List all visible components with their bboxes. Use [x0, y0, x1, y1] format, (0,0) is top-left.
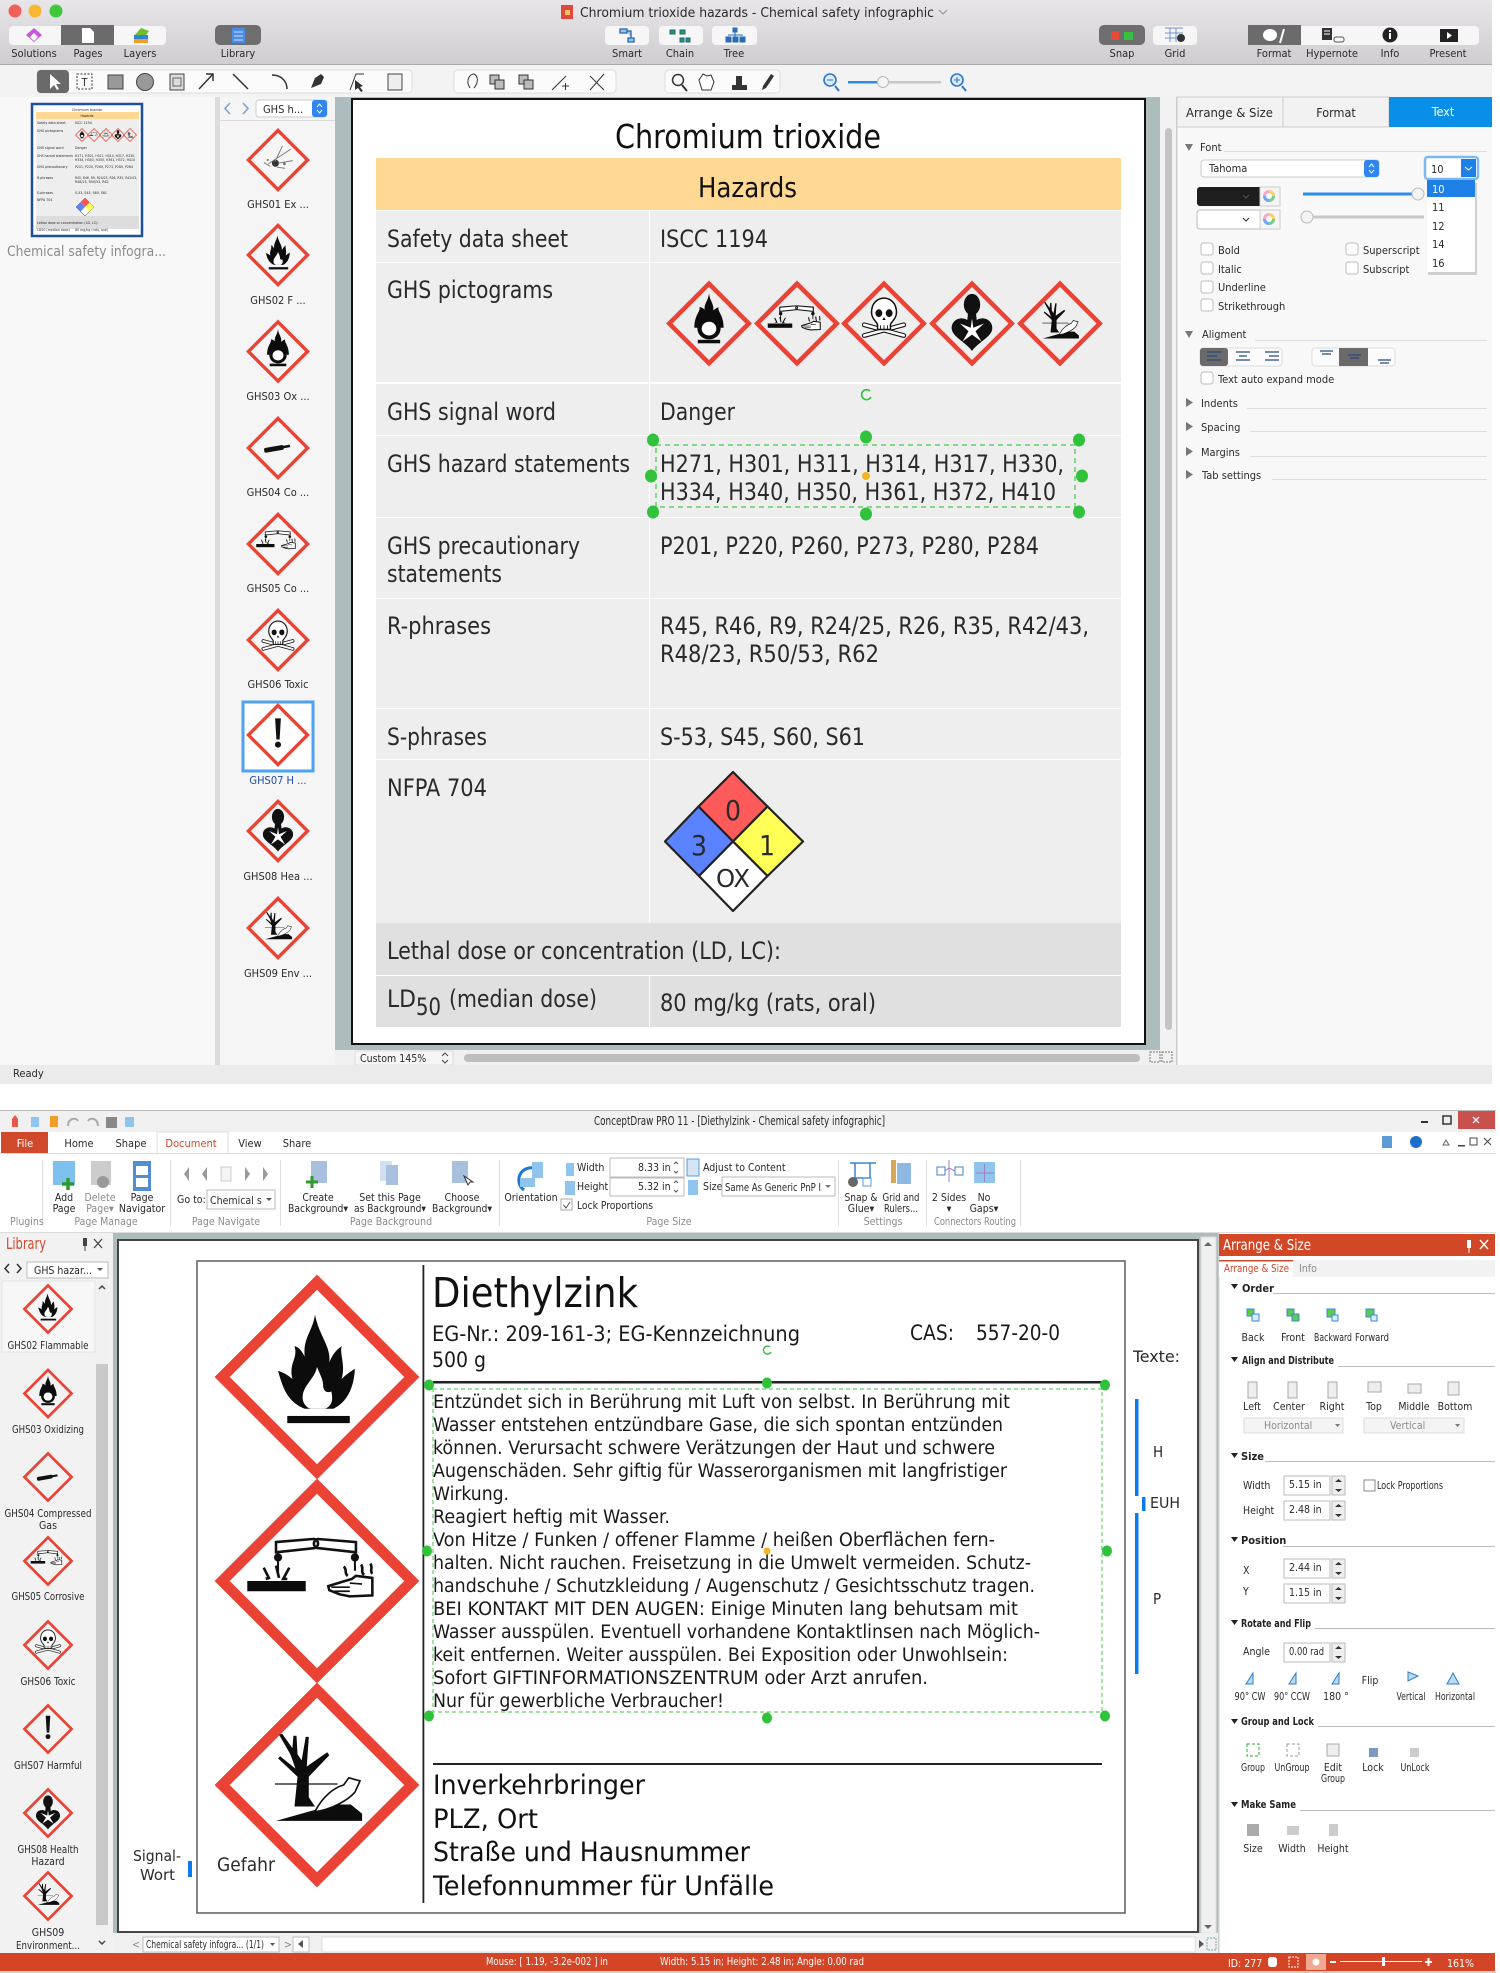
page thumbnail: LD50 (median dose): [37, 228, 70, 232]
panel: format sidebar (Text tab): Text: [1431, 104, 1455, 119]
text block: distributor address: Telefonnummer für Unfälle: [432, 1871, 774, 1902]
panel: Arrange and Size sidebar: 90° CCW: [1274, 1691, 1311, 1703]
text block: distributor address: Straße und Hausnummer: [433, 1837, 750, 1868]
panel: Arrange and Size sidebar: Forward: [1355, 1332, 1389, 1344]
status bar: lower window: Mouse: [ 1.19, -3.2e-002 ] in: [486, 1956, 608, 1968]
panel: GHS library sidebar: GHS05 Co ...: [247, 582, 309, 595]
panel: Arrange and Size sidebar: Lock Proportions: [1377, 1480, 1443, 1492]
row: GHS hazard statements: H334, H340, H350, H361, H372, H410: [660, 478, 1056, 506]
panel: mac window title bar and main toolbar: Chromium trioxide hazards - Chemical safety infographic: [580, 6, 934, 21]
panel: Arrange and Size sidebar: Back: [1242, 1332, 1265, 1344]
panel: Windows ribbon: Navigator: [119, 1203, 165, 1215]
text: CAS number: [910, 1321, 1060, 1345]
row: GHS signal word: [387, 398, 735, 426]
panel: Arrange and Size sidebar: UnLock: [1400, 1762, 1430, 1774]
panel: Windows ribbon: Choose: [445, 1192, 480, 1204]
panel: GHS library sidebar: GHS07 H ...: [249, 774, 307, 787]
panel: Windows ribbon: Glue▾: [848, 1203, 874, 1215]
panel: Windows ribbon tabs: Document: [165, 1137, 217, 1150]
panel: lower library sidebar: GHS05 Corrosive: [12, 1591, 85, 1603]
panel: lower library sidebar: GHS02 Flammable: [8, 1340, 89, 1352]
row: GHS pictograms: GHS pictograms: [387, 276, 553, 304]
panel: format sidebar (Text tab): Superscript: [1363, 244, 1420, 257]
panel: Windows ribbon: No: [978, 1192, 991, 1204]
panel: lower library sidebar: GHS08 Health: [18, 1844, 79, 1856]
panel: mac window title bar and main toolbar: Smart: [612, 47, 642, 60]
panel: Windows ribbon: Set this Page: [359, 1192, 421, 1204]
panel: GHS library sidebar: GHS h...: [263, 103, 303, 116]
text block: hazard and precaution statements: Wasser ausspülen. Eventuell vorhandene Kontaktlinsen nach Möglich-: [433, 1622, 1040, 1643]
panel: Arrange and Size sidebar: 90° CW: [1234, 1691, 1266, 1703]
page thumbnail: GHS signal word: [37, 146, 64, 150]
panel: Arrange and Size sidebar: Group and Lock: [1241, 1715, 1314, 1728]
panel: format sidebar (Text tab): Subscript: [1363, 263, 1410, 276]
page thumbnail: S-phrases: [37, 191, 53, 195]
panel: Arrange and Size sidebar: Right: [1320, 1401, 1345, 1413]
row: GHS precautionary statements: P201, P220, P260, P273, P280, P284: [660, 532, 1039, 560]
panel: format sidebar (Text tab): Format: [1316, 105, 1356, 120]
heading band: Hazards: Hazards: [698, 171, 797, 204]
panel: Windows ribbon: Chemical s: [210, 1195, 262, 1207]
text block: hazard and precaution statements: Nur für gewerbliche Verbraucher!: [433, 1691, 724, 1712]
panel: Arrange and Size sidebar: Position: [1241, 1534, 1286, 1547]
status bar: lower window: [0, 1953, 1496, 1973]
row: NFPA 704: NFPA 704: [387, 774, 487, 802]
panel: lower canvas area: Chemical safety infogra... (1/1): [146, 1939, 264, 1951]
text block: hazard and precaution statements: Augenschäden. Sehr giftig für Wasserorganismen mit langfristiger: [433, 1461, 1007, 1482]
selection handles around statements: [422, 1346, 1112, 1724]
panel: GHS library sidebar: GHS01 Ex ...: [247, 198, 309, 211]
text block: distributor address: PLZ, Ort: [433, 1804, 538, 1835]
panel: format sidebar (Text tab): Text auto expand mode: [1217, 373, 1334, 386]
panel: format sidebar (Text tab): Strikethrough: [1218, 300, 1285, 313]
signal word labels: Signal-: [133, 1847, 181, 1865]
row: GHS precautionary statements: GHS precautionary: [387, 532, 580, 560]
panel: GHS label card: [197, 1261, 1125, 1913]
panel: lower library sidebar: GHS09: [32, 1927, 64, 1939]
panel: Windows ribbon: Height: [577, 1181, 609, 1193]
panel: Arrange and Size sidebar: Vertical: [1396, 1691, 1426, 1703]
panel: mac window title bar and main toolbar: Solutions: [11, 47, 57, 60]
row: GHS signal word: GHS signal word: [387, 398, 556, 426]
status bar: lower window: 161%: [1447, 1958, 1474, 1970]
panel: Arrange and Size sidebar: Left: [1243, 1401, 1261, 1413]
panel: Windows ribbon: Page Background: [350, 1216, 432, 1228]
panel: format sidebar (Text tab): [1176, 97, 1492, 1065]
panel: Windows title bar: ConceptDraw PRO 11 - [Diethylzink - Chemical safety infographic]: [594, 1114, 885, 1128]
text block: distributor address: Inverkehrbringer: [433, 1770, 645, 1801]
row: S-phrases: [387, 723, 865, 751]
panel: Arrange and Size sidebar: Angle: [1243, 1646, 1270, 1658]
panel: Windows ribbon tabs: [0, 1132, 1496, 1154]
text block: hazard and precaution statements: Wasser entstehen entzündbare Gase, die sich spontan entzünden: [433, 1415, 1003, 1436]
panel: Arrange and Size sidebar: Group: [1321, 1773, 1345, 1785]
NFPA 704 fire diamond: 1: [759, 829, 775, 862]
annotation: text section brackets: [1132, 1347, 1180, 1674]
panel: Windows ribbon: as Background▾: [354, 1203, 426, 1215]
page thumbnail: H334, H340, H350, H361, H372, H410: [75, 158, 135, 162]
panel: Windows ribbon: Gaps▾: [970, 1203, 999, 1215]
panel: Arrange and Size sidebar: Horizontal: [1264, 1420, 1312, 1432]
row: R-phrases: R48/23, R50/53, R62: [660, 640, 879, 668]
page thumbnail: ISCC 1194: [75, 121, 92, 125]
icon: environment pictogram: [222, 1690, 412, 1880]
page thumbnail: R48/23, R50/53, R62: [75, 180, 109, 184]
row: LD50 median dose: 80 mg/kg (rats, oral): [660, 989, 876, 1017]
status bar: lower window: ID: 277: [1228, 1958, 1262, 1970]
row: GHS hazard statements: H271, H301, H311, H314, H317, H330,: [660, 450, 1064, 478]
row: GHS hazard statements: GHS hazard statements: [387, 450, 630, 478]
text block: hazard and precaution statements: BEI KONTAKT MIT DEN AUGEN: Einige Minuten lang behutsam mit: [433, 1599, 1019, 1620]
panel: Arrange and Size sidebar: Middle: [1398, 1401, 1430, 1413]
panel: format sidebar (Text tab): Underline: [1218, 281, 1266, 294]
panel: mac window title bar and main toolbar: Snap: [1110, 47, 1134, 60]
panel: Arrange and Size sidebar: Vertical: [1390, 1420, 1425, 1432]
status bar: Ready: [0, 1065, 1492, 1084]
panel: lower library sidebar: [0, 1233, 113, 1953]
panel: Arrange and Size sidebar: Width: [1278, 1843, 1306, 1855]
panel: Windows ribbon: [0, 1153, 1496, 1234]
page thumbnail: Hazards: [80, 114, 94, 118]
panel: Arrange and Size sidebar: Edit: [1324, 1762, 1342, 1774]
panel: GHS library sidebar: GHS09 Env ...: [244, 967, 312, 980]
panel: Arrange and Size sidebar: Arrange & Size: [1223, 1236, 1311, 1254]
panel: Arrange and Size sidebar: Align and Distribute: [1242, 1354, 1334, 1367]
panel: Windows ribbon: 5.32 in: [638, 1181, 671, 1193]
panel: Windows ribbon: Rulers...: [884, 1203, 918, 1215]
heading: Diethylzink: Diethylzink: [432, 1269, 639, 1317]
panel: format sidebar (Text tab): Aligment: [1202, 328, 1247, 341]
panel: Windows ribbon: Connectors Routing: [934, 1216, 1016, 1228]
page thumbnail: GHS pictograms: [37, 129, 64, 133]
panel: Arrange and Size sidebar: 0.00 rad: [1289, 1646, 1324, 1658]
panel: GHS library sidebar: GHS08 Hea ...: [243, 870, 313, 883]
panel: lower library sidebar: GHS03 Oxidizing: [12, 1424, 84, 1436]
panel: mac window title bar and main toolbar: Pages: [73, 47, 103, 60]
panel: Arrange and Size sidebar: 2.44 in: [1289, 1562, 1322, 1574]
panel: top canvas area: [335, 97, 1176, 1065]
panel: format sidebar (Text tab): Font: [1200, 141, 1222, 154]
panel: Windows title bar: [0, 1110, 1496, 1132]
panel: Windows ribbon: Background▾: [288, 1203, 348, 1215]
panel: Windows ribbon: Size: [703, 1181, 723, 1193]
panel: Arrange and Size sidebar: Make Same: [1241, 1798, 1296, 1811]
page thumbnail: GHS hazard statements: [37, 154, 73, 158]
font size dropdown: 16: [1432, 257, 1445, 270]
panel: format sidebar (Text tab): Bold: [1218, 244, 1240, 257]
panel: Arrange and Size sidebar: Arrange & Size: [1224, 1263, 1289, 1275]
NFPA 704 fire diamond: [665, 772, 803, 911]
page thumbnail: Danger: [75, 146, 88, 150]
annotation: text section brackets: EUH: [1150, 1494, 1180, 1512]
panel: format sidebar (Text tab): Arrange & Size: [1186, 105, 1273, 120]
panel: Arrange and Size sidebar: 180 °: [1323, 1691, 1349, 1703]
panel: format sidebar (Text tab): Indents: [1201, 397, 1238, 410]
panel: GHS library sidebar: [220, 97, 335, 1065]
panel: Windows ribbon: Same As Generic PnP I: [725, 1182, 821, 1194]
panel: Windows ribbon: Delete: [84, 1192, 116, 1204]
page thumbnail: P201, P220, P260, P273, P280, P284: [75, 165, 133, 169]
page thumbnail: NFPA 704: [37, 198, 52, 202]
panel: lower canvas area: [113, 1233, 1218, 1953]
text block: hazard and precaution statements: handschuhe / Schutzkleidung / Augenschutz / Gesichtsschutz tragen.: [433, 1576, 1035, 1597]
panel: Arrange and Size sidebar: Horizontal: [1435, 1691, 1475, 1703]
panel: Windows ribbon tabs: Home: [64, 1137, 94, 1150]
panel: Windows ribbon: Page Navigate: [192, 1216, 260, 1228]
panel: Windows ribbon: Go to:: [177, 1194, 206, 1206]
page name: Chemical safety infogra...: [7, 244, 166, 260]
panel: Arrange and Size sidebar: Size: [1243, 1843, 1263, 1855]
page thumbnail: GHS precautionary: [37, 165, 68, 169]
text block: hazard and precaution statements: Von Hitze / Funken / offener Flamme / heißen Oberflächen fern-: [433, 1530, 995, 1551]
row: NFPA 704: [387, 772, 803, 911]
panel: Arrange and Size sidebar: Width: [1243, 1480, 1270, 1492]
panel: lower library sidebar: Hazard: [31, 1856, 65, 1868]
row: R-phrases: R45, R46, R9, R24/25, R26, R35, R42/43,: [660, 612, 1089, 640]
panel: mac window title bar and main toolbar: Format: [1257, 47, 1292, 60]
panel: lower library sidebar: GHS06 Toxic: [20, 1676, 76, 1688]
panel: Windows ribbon: Page Manage: [74, 1216, 138, 1228]
NFPA 704 fire diamond: 3: [691, 829, 707, 862]
panel: Arrange and Size sidebar: [1218, 1233, 1496, 1953]
row: GHS precautionary statements: statements: [387, 560, 502, 588]
font size dropdown: [1427, 180, 1477, 275]
NFPA 704 fire diamond: OX: [716, 864, 750, 893]
row: GHS signal word: Danger: [660, 398, 735, 426]
panel: Arrange and Size sidebar: Size: [1241, 1450, 1264, 1463]
panel: lower library sidebar: Library: [6, 1234, 46, 1253]
text: EG number and quantity: 500 g: [432, 1348, 486, 1372]
row: lethal dose heading: Lethal dose or concentration (LD, LC):: [387, 937, 781, 965]
panel: Windows ribbon tabs: Share: [283, 1137, 311, 1150]
row: S-phrases: S-phrases: [387, 723, 487, 751]
panel: Arrange and Size sidebar: Backward: [1314, 1332, 1352, 1344]
panel: Arrange and Size sidebar: Lock: [1362, 1762, 1384, 1774]
row: R-phrases: [387, 612, 1089, 668]
panel: Arrange and Size sidebar: Group: [1241, 1762, 1265, 1774]
row: GHS hazard statements: [387, 450, 1064, 506]
panel: Windows ribbon: Width: [577, 1162, 604, 1174]
panel: format sidebar (Text tab): Tahoma: [1208, 162, 1247, 175]
text: CAS number: CAS:: [910, 1321, 954, 1345]
text: CAS number: 557-20-0: [976, 1321, 1060, 1345]
panel: drawing tools toolbar: T: [81, 77, 88, 89]
panel: Windows ribbon: Snap &: [844, 1192, 878, 1204]
panel: Windows ribbon tabs: View: [238, 1137, 262, 1150]
text block: hazard and precaution statements: [433, 1392, 1040, 1712]
annotation: text section brackets: Texte:: [1132, 1347, 1180, 1366]
panel: Windows ribbon tabs: Shape: [116, 1137, 146, 1150]
icon: corrosive pictogram: [222, 1486, 412, 1676]
panel: Windows ribbon: Grid and: [882, 1192, 920, 1204]
NFPA 704 fire diamond: 0: [725, 794, 741, 827]
page thumbnail: R-phrases: [37, 176, 53, 180]
text block: hazard and precaution statements: Reagiert heftig mit Wasser.: [433, 1507, 670, 1528]
panel: Windows ribbon: Lock Proportions: [577, 1200, 653, 1212]
panel: GHS library sidebar: GHS03 Ox ...: [246, 390, 310, 403]
panel: Arrange and Size sidebar: Center: [1273, 1401, 1305, 1413]
panel: GHS library sidebar: GHS02 F ...: [250, 294, 306, 307]
font size dropdown: 10: [1432, 183, 1445, 196]
annotation: text section brackets: P: [1153, 1590, 1161, 1608]
text block: hazard and precaution statements: können. Verursacht schwere Verätzungen der Haut und schwere: [433, 1438, 995, 1459]
page thumbnail: R45, R46, R9, R24/25, R26, R35, R42/43,: [75, 176, 137, 180]
panel: mac window title bar and main toolbar: Present: [1429, 47, 1467, 60]
panel: lower library sidebar: GHS04 Compressed: [4, 1508, 92, 1520]
panel: format sidebar (Text tab): 10: [1431, 163, 1444, 176]
panel: top canvas area: Custom 145%: [360, 1053, 426, 1065]
panel: Windows ribbon: 2 Sides: [932, 1192, 966, 1204]
font size dropdown: 12: [1432, 220, 1445, 233]
row: safety data sheet: [387, 225, 768, 253]
panel: Windows ribbon tabs: File: [17, 1137, 33, 1150]
text block: hazard and precaution statements: Wirkung.: [433, 1484, 509, 1505]
panel: mac window title bar and main toolbar: [0, 0, 1492, 65]
text block: hazard and precaution statements: Entzündet sich in Berührung mit Luft von selbst. In Berührung mit: [433, 1392, 1010, 1413]
panel: Arrange and Size sidebar: Flip: [1362, 1675, 1378, 1687]
panel: Arrange and Size sidebar: Front: [1281, 1332, 1305, 1344]
panel: mac window title bar and main toolbar: Layers: [124, 47, 156, 60]
row: LD50 median dose: LD: [387, 985, 416, 1013]
signal word labels: [133, 1847, 276, 1884]
panel: lower library sidebar: Gas: [39, 1520, 57, 1532]
panel: Arrange and Size sidebar: Height: [1243, 1505, 1275, 1517]
page thumbnail: H271, H301, H311, H314, H317, H330,: [75, 154, 135, 158]
text block: distributor address: [432, 1770, 774, 1902]
panel: lower canvas area: >: [284, 1939, 292, 1951]
text block: hazard and precaution statements: keit entfernen. Weiter ausspülen. Bei Exposition oder Unwohlsein:: [433, 1645, 1008, 1666]
signal word labels: Gefahr: [217, 1854, 276, 1876]
row: GHS precautionary statements: [387, 532, 1039, 588]
panel: Arrange and Size sidebar: Info: [1299, 1263, 1317, 1275]
status bar: Ready: Ready: [13, 1067, 44, 1080]
panel: Windows ribbon: Create: [302, 1192, 334, 1204]
font size dropdown: 11: [1432, 201, 1445, 214]
panel: mac window title bar and main toolbar: Tree: [723, 47, 744, 60]
panel: format sidebar (Text tab): Spacing: [1201, 421, 1240, 434]
panel: Windows ribbon: Orientation: [504, 1192, 558, 1204]
page thumbnail: Safety data sheet: [37, 121, 66, 125]
font size dropdown: 14: [1432, 238, 1445, 251]
panel: mac window title bar and main toolbar: Library: [221, 47, 255, 60]
row: safety data sheet: ISCC 1194: [660, 225, 768, 253]
title: Chromium trioxide: Chromium trioxide: [615, 117, 881, 156]
panel: mac window title bar and main toolbar: Info: [1381, 47, 1399, 60]
panel: Windows ribbon: Plugins: [10, 1216, 44, 1228]
text: EG number and quantity: [432, 1322, 800, 1372]
icon: flammable pictogram: [222, 1282, 412, 1472]
annotation: text section brackets: H: [1153, 1443, 1163, 1461]
panel: drawing tools toolbar: [0, 65, 1492, 97]
selection handles around hazard statements: [645, 390, 1088, 520]
panel: Windows ribbon: Page: [53, 1203, 76, 1215]
panel: Windows ribbon: Page Size: [646, 1216, 692, 1228]
panel: Arrange and Size sidebar: Y: [1242, 1586, 1249, 1598]
panel: format sidebar (Text tab): Margins: [1201, 446, 1240, 459]
panel: format sidebar (Text tab): Italic: [1218, 263, 1242, 276]
panel: format sidebar (Text tab): Tab settings: [1201, 469, 1261, 482]
row: LD50 median dose: [387, 985, 876, 1021]
panel: mac window title bar and main toolbar: Grid: [1165, 47, 1185, 60]
row: S-phrases: S-53, S45, S60, S61: [660, 723, 865, 751]
panel: Arrange and Size sidebar: UnGroup: [1274, 1762, 1310, 1774]
row: R-phrases: R-phrases: [387, 612, 491, 640]
signal word labels: Wort: [140, 1866, 176, 1884]
panel: GHS library sidebar: GHS06 Toxic: [247, 678, 309, 691]
panel: mac window title bar and main toolbar: Chain: [666, 47, 694, 60]
panel: Arrange and Size sidebar: 2.48 in: [1289, 1504, 1322, 1516]
panel: Arrange and Size sidebar: X: [1243, 1565, 1250, 1577]
panel: GHS library sidebar: GHS04 Co ...: [247, 486, 309, 499]
page thumbnail: [32, 104, 142, 236]
row: safety data sheet: Safety data sheet: [387, 225, 568, 253]
panel: Arrange and Size sidebar: Height: [1317, 1843, 1349, 1855]
panel: Windows ribbon: Add: [55, 1192, 73, 1204]
text: EG number and quantity: EG-Nr.: 209-161-3; EG-Kennzeichnung: [432, 1322, 800, 1346]
panel: Windows ribbon: Page: [131, 1192, 154, 1204]
panel: lower library sidebar: Environment...: [16, 1940, 80, 1952]
page thumbnail: Chromium trioxide: [72, 108, 102, 112]
panel: Arrange and Size sidebar: Rotate and Flip: [1241, 1617, 1311, 1630]
panel: Arrange and Size sidebar: Top: [1365, 1401, 1382, 1413]
text block: hazard and precaution statements: Sofort GIFTINFORMATIONSZENTRUM oder Arzt anrufen.: [433, 1668, 928, 1689]
row: LD50 median dose: (median dose): [449, 985, 597, 1013]
panel: Windows ribbon: ▾: [947, 1203, 952, 1215]
panel: Windows ribbon: Adjust to Content: [703, 1162, 786, 1174]
panel: Windows ribbon: Page▾: [86, 1203, 114, 1215]
panel: Arrange and Size sidebar: 1.15 in: [1289, 1587, 1322, 1599]
panel: lower library sidebar: GHS07 Harmful: [14, 1760, 82, 1772]
heading band: Hazards: [376, 158, 1121, 210]
panel: pages thumbnail sidebar: [0, 97, 220, 1065]
panel: mac window title bar and main toolbar: Hypernote: [1306, 47, 1358, 60]
text block: hazard and precaution statements: halten. Nicht rauchen. Freisetzung in die Umwelt vermeiden. Schutz-: [433, 1553, 1031, 1574]
panel: Arrange and Size sidebar: Order: [1242, 1282, 1274, 1295]
panel: Windows ribbon: Settings: [864, 1216, 902, 1228]
panel: Windows ribbon: Background▾: [432, 1203, 492, 1215]
page thumbnail: S-53, S45, S60, S61: [75, 191, 107, 195]
page thumbnail: Lethal dose or concentration (LD, LC):: [37, 221, 98, 225]
status bar: lower window: Width: 5.15 in; Height: 2.48 in; Angle: 0.00 rad: [660, 1956, 864, 1968]
panel: Windows ribbon: 8.33 in: [638, 1162, 671, 1174]
panel: Arrange and Size sidebar: Bottom: [1438, 1401, 1472, 1413]
page thumbnail: 80 mg/kg (rats, oral): [75, 228, 108, 232]
panel: Arrange and Size sidebar: 5.15 in: [1289, 1479, 1322, 1491]
panel: lower library sidebar: GHS hazar...: [34, 1265, 92, 1277]
panel: lower canvas area: <: [132, 1939, 140, 1951]
panel: hazards table: [376, 158, 1121, 1027]
row: GHS pictograms: [387, 276, 1100, 363]
row: LD50 median dose: 50: [416, 993, 441, 1021]
